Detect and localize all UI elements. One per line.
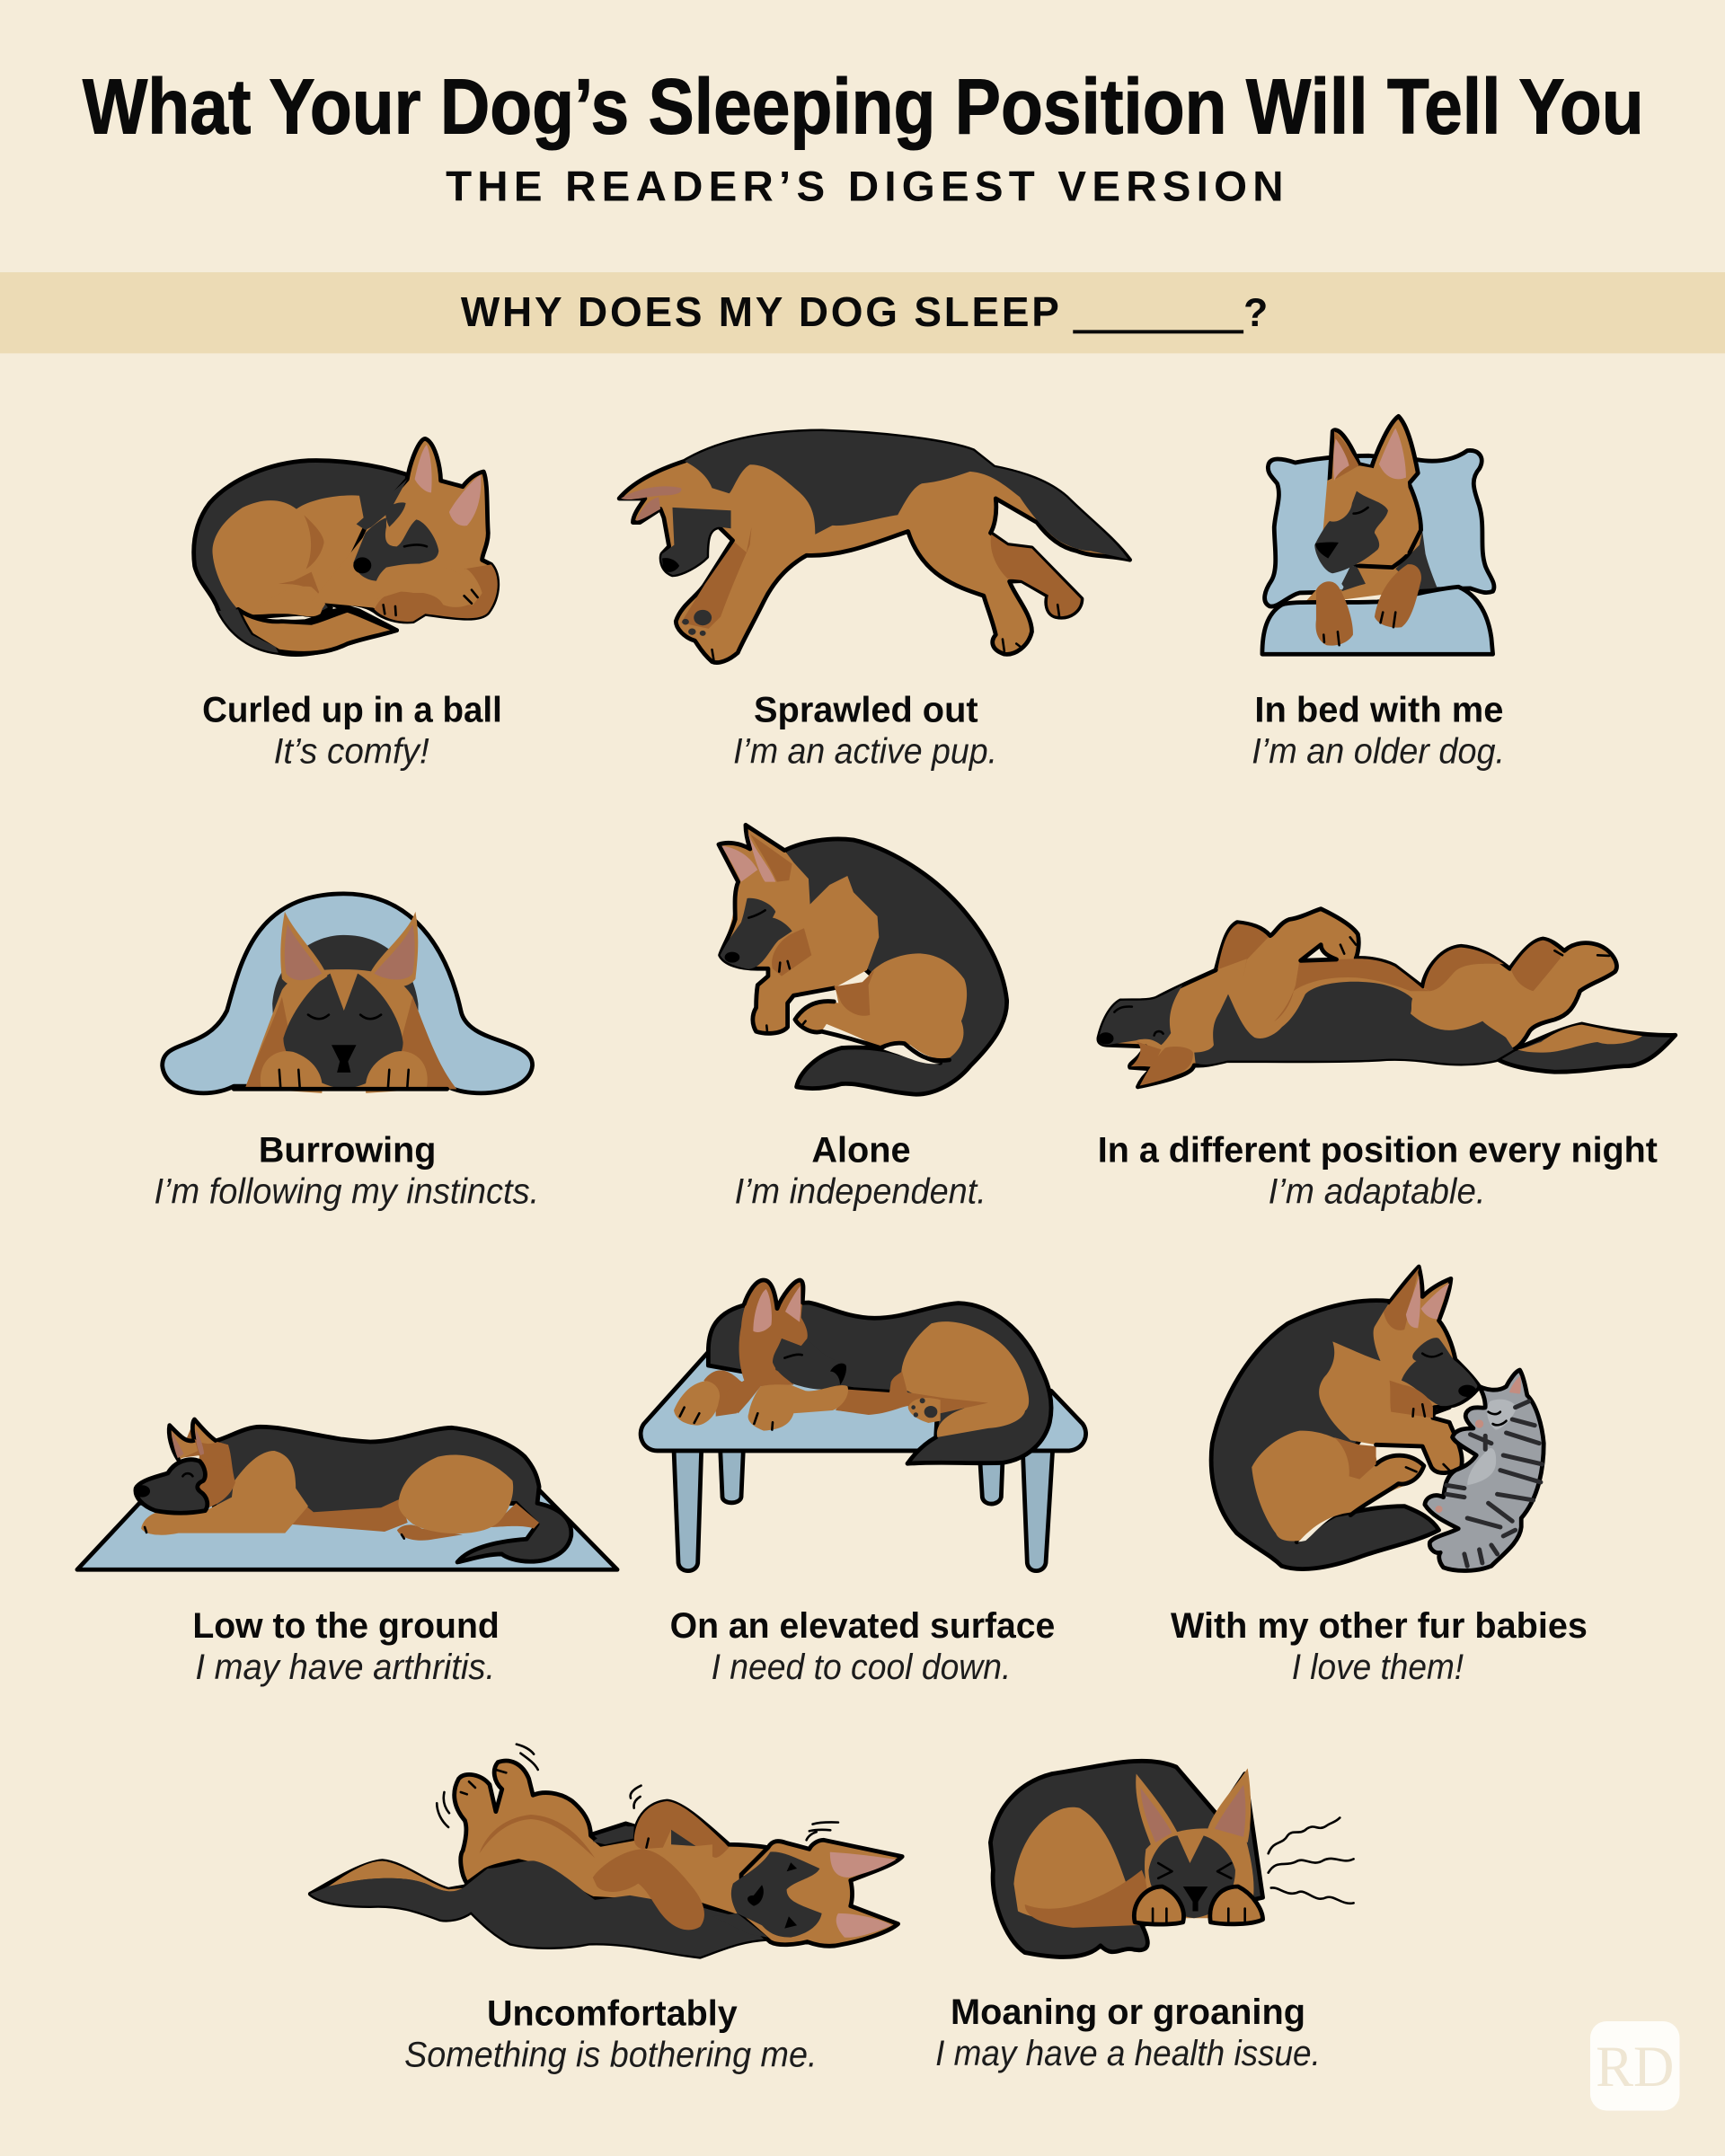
panel: curled up in a ball: [194, 438, 502, 771]
caption: I may have arthritis.: [195, 1648, 495, 1687]
dog illustration: alone: [719, 825, 1007, 1094]
label: Uncomfortably: [487, 1994, 738, 2034]
heading band: ?: [1243, 291, 1268, 335]
dog illustration: on back: [1098, 909, 1676, 1087]
dog illustration: curled: [194, 438, 498, 655]
label: In a different position every night: [1098, 1130, 1658, 1170]
heading band: [0, 272, 1725, 353]
label: With my other fur babies: [1171, 1606, 1588, 1646]
icon: tabby cat: [1425, 1370, 1544, 1570]
caption: I’m an active pup.: [733, 731, 997, 771]
label: Burrowing: [259, 1130, 436, 1170]
label: Alone: [811, 1130, 911, 1170]
caption: I’m an older dog.: [1252, 731, 1505, 771]
icon: groaning sound waves: [1269, 1817, 1354, 1904]
label: Low to the ground: [192, 1606, 500, 1646]
label: On an elevated surface: [670, 1606, 1055, 1646]
dog illustration: moaning: [990, 1761, 1263, 1957]
label: Sprawled out: [754, 691, 978, 730]
logo: RD badge: RD: [1596, 2035, 1674, 2099]
panel: in bed with me: [1252, 416, 1505, 771]
caption: I’m following my instincts.: [154, 1171, 539, 1211]
panel: on an elevated surface: [641, 1280, 1086, 1687]
caption: I love them!: [1292, 1648, 1464, 1687]
dog illustration: on table: [641, 1280, 1086, 1571]
dog illustration: under blanket: [163, 894, 533, 1093]
caption: I’m independent.: [735, 1171, 986, 1211]
caption: I need to cool down.: [712, 1648, 1011, 1687]
heading band: WHY DOES MY DOG SLEEP: [461, 288, 1059, 335]
dog illustration: on pillow: [1262, 416, 1494, 654]
subtitle: THE READER’S DIGEST VERSION: [446, 163, 1284, 210]
label: Moaning or groaning: [951, 1993, 1305, 2032]
dog illustration: on mat: [77, 1419, 617, 1569]
panel: in a different position: [1098, 909, 1676, 1211]
caption: Something is bothering me.: [404, 2036, 817, 2075]
panel: with my other fur babies: [1171, 1267, 1588, 1687]
dog illustration: uncomfortable on back: [310, 1745, 902, 1957]
panel: burrowing: [154, 894, 539, 1211]
logo: RD badge: [1590, 2021, 1679, 2110]
dog illustration: with cat: [1211, 1267, 1480, 1569]
dog illustration: sprawled: [619, 431, 1130, 663]
caption: I’m adaptable.: [1269, 1171, 1486, 1211]
caption: It’s comfy!: [274, 731, 429, 771]
label: In bed with me: [1254, 691, 1503, 730]
panel: moaning or groaning: [935, 1761, 1354, 2073]
label: Curled up in a ball: [202, 691, 502, 730]
panel: alone: [719, 825, 1007, 1211]
panel: uncomfortably: [310, 1745, 902, 2075]
panel: low to the ground: [77, 1419, 617, 1687]
panel: sprawled out: [619, 431, 1130, 771]
caption: I may have a health issue.: [935, 2034, 1321, 2073]
